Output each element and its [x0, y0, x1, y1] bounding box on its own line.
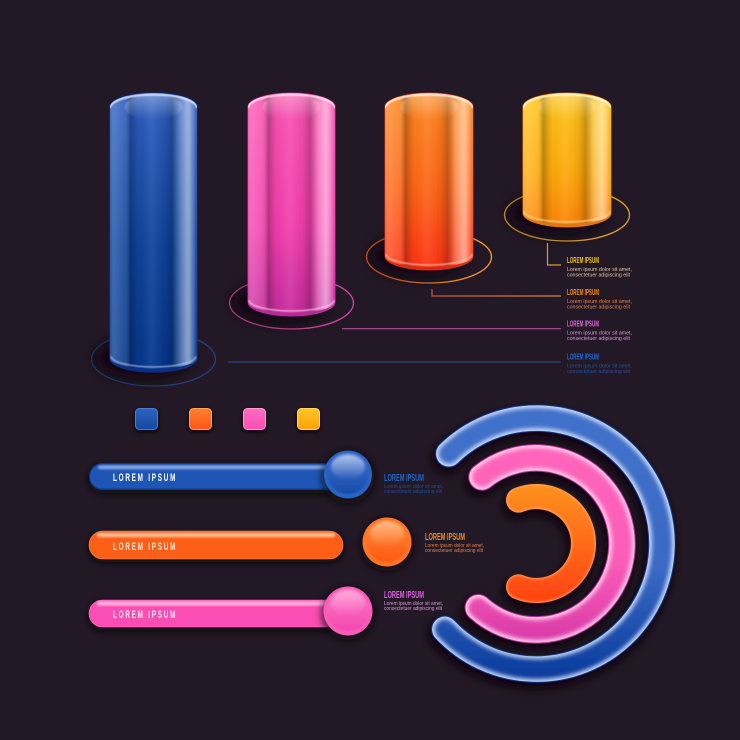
arc: pink middle ring: [476, 458, 622, 635]
knob: orange: [361, 518, 413, 571]
bar: pink with knob: LOREM IPSUM: [113, 608, 177, 620]
label: blue: LOREM IPSUM: [567, 352, 599, 362]
label: pink bar: [384, 589, 443, 612]
label: blue: [567, 352, 632, 375]
square: orange: [189, 408, 212, 432]
square: pink: [243, 408, 266, 432]
label: blue: Lorem ipsum dolor sit amet,: [567, 364, 632, 370]
bar: blue with knob: [89, 450, 374, 504]
label: pink bar: consectetuer adipiscing elit: [384, 606, 443, 612]
label: orange bar: LOREM IPSUM: [425, 531, 465, 543]
label: blue bar: Lorem ipsum dolor sit amet,: [384, 484, 443, 490]
label: orange: consectetuer adipiscing elit: [567, 304, 631, 310]
bar: blue with knob: LOREM IPSUM: [113, 471, 177, 483]
square: yellow: [297, 408, 320, 432]
label: pink bar: Lorem ipsum dolor sit amet,: [384, 601, 443, 607]
label: pink: consectetuer adipiscing elit: [567, 336, 631, 342]
label: pink bar: LOREM IPSUM: [384, 589, 424, 601]
label: pink: Lorem ipsum dolor sit amet,: [567, 330, 632, 336]
label: orange bar: consectetuer adipiscing elit: [425, 548, 484, 554]
label: orange: Lorem ipsum dolor sit amet,: [567, 299, 632, 305]
connector: orange: [432, 289, 561, 296]
blue cylinder with base ring: [92, 93, 216, 386]
connector: pink: [342, 328, 561, 330]
connector: yellow: [548, 243, 561, 265]
arc: blue outer ring: [443, 418, 662, 674]
bar: orange: [89, 531, 343, 562]
orange cylinder with base ring: [366, 93, 492, 283]
bar: pink with knob: [89, 586, 374, 640]
label: orange: [567, 287, 632, 310]
label: yellow: consectetuer adipiscing elit: [567, 272, 631, 278]
label: blue bar: consectetuer adipiscing elit: [384, 489, 443, 495]
pink cylinder with base ring: [230, 93, 354, 329]
square: blue: [135, 408, 158, 432]
label: orange bar: Lorem ipsum dolor sit amet,: [425, 543, 484, 549]
label: blue: consectetuer adipiscing elit: [567, 369, 631, 375]
label: pink: [567, 318, 632, 342]
label: orange bar: [425, 531, 484, 554]
label: blue bar: [384, 472, 443, 495]
yellow cylinder with base ring: [504, 93, 630, 241]
bar: orange: LOREM IPSUM: [113, 540, 177, 552]
legend squares: [135, 408, 320, 432]
label: blue bar: LOREM IPSUM: [384, 472, 424, 484]
label: yellow: Lorem ipsum dolor sit amet,: [567, 267, 632, 273]
label: yellow: LOREM IPSUM: [567, 255, 599, 265]
label: pink: LOREM IPSUM: [567, 318, 599, 328]
label: yellow: [567, 255, 632, 278]
arc: orange inner ring: [516, 496, 584, 596]
connector: blue: [228, 361, 561, 363]
label: orange: LOREM IPSUM: [567, 287, 599, 297]
